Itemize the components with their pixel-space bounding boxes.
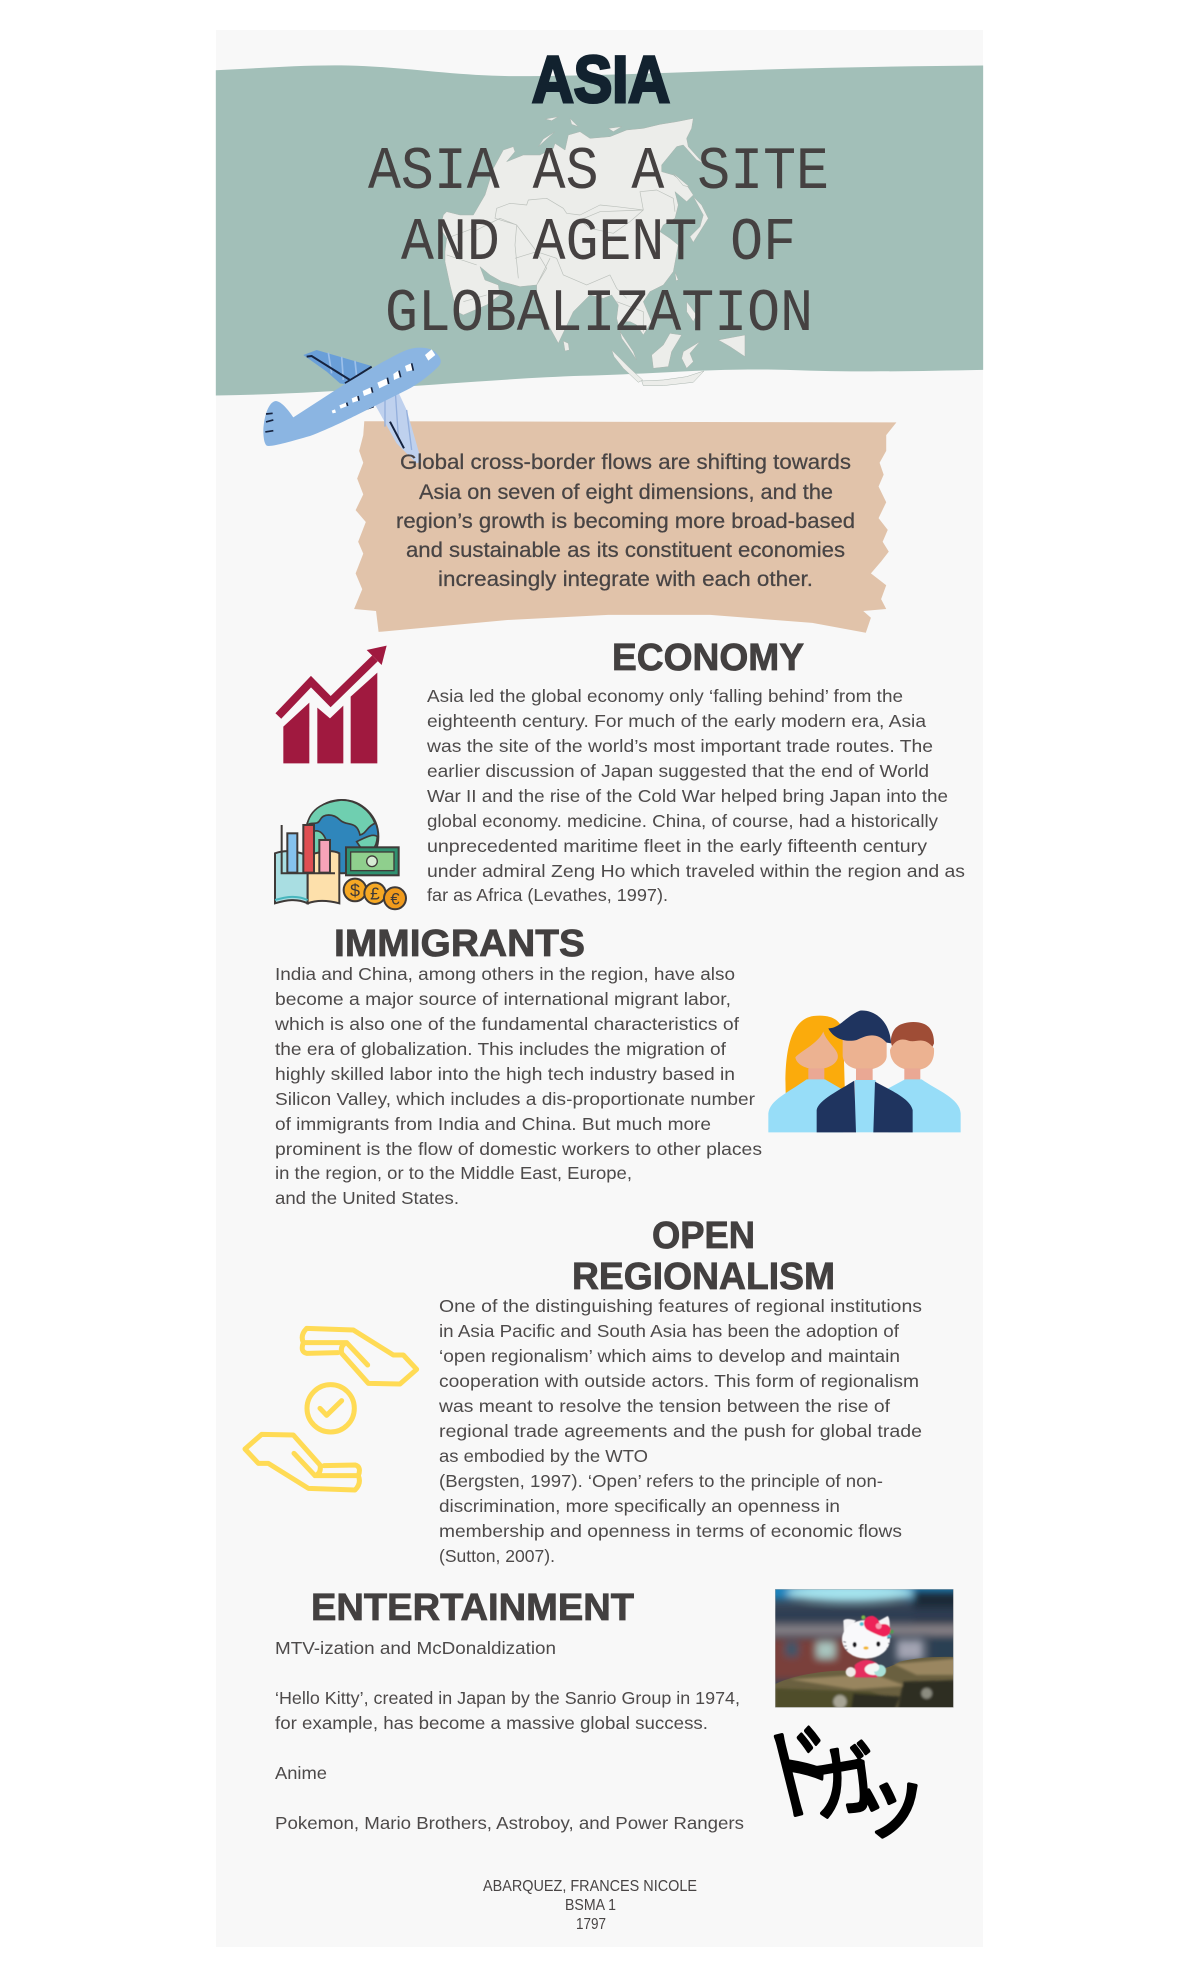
section: economy xyxy=(426,637,965,905)
open regionalism body text: ‘open regionalism’ which aims to develop and maintain xyxy=(439,1346,900,1366)
icon: global economy: £ xyxy=(370,884,380,904)
economy body text xyxy=(426,686,965,905)
economy body text: under admiral Zeng Ho which traveled within the region and as xyxy=(427,861,965,881)
economy body text: global economy. medicine. China, of course, had a historically xyxy=(427,811,938,831)
header band xyxy=(216,65,983,396)
immigrants body text xyxy=(274,964,762,1208)
intro text xyxy=(396,451,855,591)
section: entertainment xyxy=(275,1587,744,1833)
torn paper intro panel xyxy=(354,421,896,633)
footer credits xyxy=(483,1878,697,1933)
economy body text: unprecedented maritime fleet in the early fifteenth century xyxy=(427,836,927,856)
heading: immigrants: IMMIGRANTS xyxy=(334,923,585,965)
entertainment text: MTV-ization and McDonaldization xyxy=(275,1638,556,1658)
Japanese onomatopoeia lettering: ガ xyxy=(803,1733,885,1833)
immigrants body text: highly skilled labor into the high tech industry based in xyxy=(275,1064,735,1084)
immigrants body text: of immigrants from India and China. But much more xyxy=(275,1114,711,1134)
heading: entertainment: ENTERTAINMENT xyxy=(311,1587,634,1629)
section: immigrants xyxy=(274,923,762,1208)
Japanese onomatopoeia lettering xyxy=(751,1711,934,1851)
open regionalism body text: was meant to resolve the tension between the rise of xyxy=(438,1396,890,1416)
open regionalism body text: membership and openness in terms of economic flows xyxy=(439,1521,902,1541)
intro line 1: Global cross-border flows are shifting towards xyxy=(400,451,851,474)
icon: group of people xyxy=(768,1011,961,1132)
panel: page background xyxy=(216,30,983,1947)
author name: ABARQUEZ, FRANCES NICOLE xyxy=(483,1878,697,1895)
open regionalism body text xyxy=(438,1296,922,1566)
economy body text: eighteenth century. For much of the early modern era, Asia xyxy=(427,711,926,731)
section: open regionalism xyxy=(438,1215,922,1566)
intro line 3: region’s growth is becoming more broad-based xyxy=(396,510,855,533)
heading: subtitle line 1: ASIA AS A SITE xyxy=(368,139,829,207)
map of Asia xyxy=(440,117,745,386)
entertainment text: for example, has become a massive global success. xyxy=(275,1713,708,1733)
id number: 1797 xyxy=(576,1916,606,1933)
icon: growth chart xyxy=(278,646,387,763)
immigrants body text: Silicon Valley, which includes a dis-proportionate number xyxy=(275,1089,755,1109)
open regionalism body text: One of the distinguishing features of regional institutions xyxy=(439,1296,922,1316)
entertainment text xyxy=(275,1638,744,1833)
title xyxy=(368,42,829,349)
intro line 4: and sustainable as its constituent economies xyxy=(406,539,845,562)
icon: hands and check xyxy=(245,1328,417,1490)
open regionalism body text: as embodied by the WTO xyxy=(439,1446,648,1466)
heading: subtitle line 2: AND AGENT OF xyxy=(401,210,796,278)
open regionalism body text: (Bergsten, 1997). ‘Open’ refers to the principle of non- xyxy=(439,1471,883,1491)
icon: global economy: $ xyxy=(350,881,360,901)
Japanese onomatopoeia lettering: ド xyxy=(751,1711,848,1837)
economy body text: War II and the rise of the Cold War helped bring Japan into the xyxy=(427,786,948,806)
economy body text: far as Africa (Levathes, 1997). xyxy=(427,885,668,905)
economy body text: was the site of the world’s most important trade routes. The xyxy=(426,736,933,756)
entertainment text: Pokemon, Mario Brothers, Astroboy, and Power Rangers xyxy=(275,1813,744,1833)
photo: Hello Kitty figure xyxy=(775,1589,954,1708)
economy body text: Asia led the global economy only ‘falling behind’ from the xyxy=(427,686,903,706)
heading: open: OPEN xyxy=(652,1215,755,1257)
icon: airplane xyxy=(263,348,441,463)
icon: global economy xyxy=(275,800,406,909)
intro line 2: Asia on seven of eight dimensions, and the xyxy=(419,481,833,504)
class: BSMA 1 xyxy=(565,1897,616,1914)
economy body text: earlier discussion of Japan suggested that the end of World xyxy=(427,761,929,781)
heading: subtitle line 3: GLOBALIZATION xyxy=(385,281,813,349)
icon: global economy: € xyxy=(390,890,400,909)
entertainment text: Anime xyxy=(275,1763,327,1783)
open regionalism body text: regional trade agreements and the push for global trade xyxy=(439,1421,922,1441)
heading: ASIA: ASIA xyxy=(532,42,670,116)
immigrants body text: which is also one of the fundamental characteristics of xyxy=(274,1014,739,1034)
immigrants body text: India and China, among others in the region, have also xyxy=(275,964,735,984)
Japanese onomatopoeia lettering: ッ xyxy=(845,1754,934,1851)
heading: economy: ECONOMY xyxy=(612,637,804,679)
immigrants body text: the era of globalization. This includes the migration of xyxy=(275,1039,726,1059)
heading: regionalism: REGIONALISM xyxy=(572,1256,835,1298)
open regionalism body text: cooperation with outside actors. This form of regionalism xyxy=(439,1371,919,1391)
immigrants body text: and the United States. xyxy=(275,1188,459,1208)
immigrants body text: become a major source of international migrant labor, xyxy=(275,989,731,1009)
open regionalism body text: discrimination, more specifically an openness in xyxy=(439,1496,840,1516)
immigrants body text: prominent is the flow of domestic workers to other places xyxy=(275,1139,762,1159)
open regionalism body text: in Asia Pacific and South Asia has been the adoption of xyxy=(439,1321,899,1341)
immigrants body text: in the region, or to the Middle East, Europe, xyxy=(275,1163,632,1183)
open regionalism body text: (Sutton, 2007). xyxy=(439,1546,555,1566)
intro line 5: increasingly integrate with each other. xyxy=(438,568,813,591)
entertainment text: ‘Hello Kitty’, created in Japan by the Sanrio Group in 1974, xyxy=(275,1688,740,1708)
